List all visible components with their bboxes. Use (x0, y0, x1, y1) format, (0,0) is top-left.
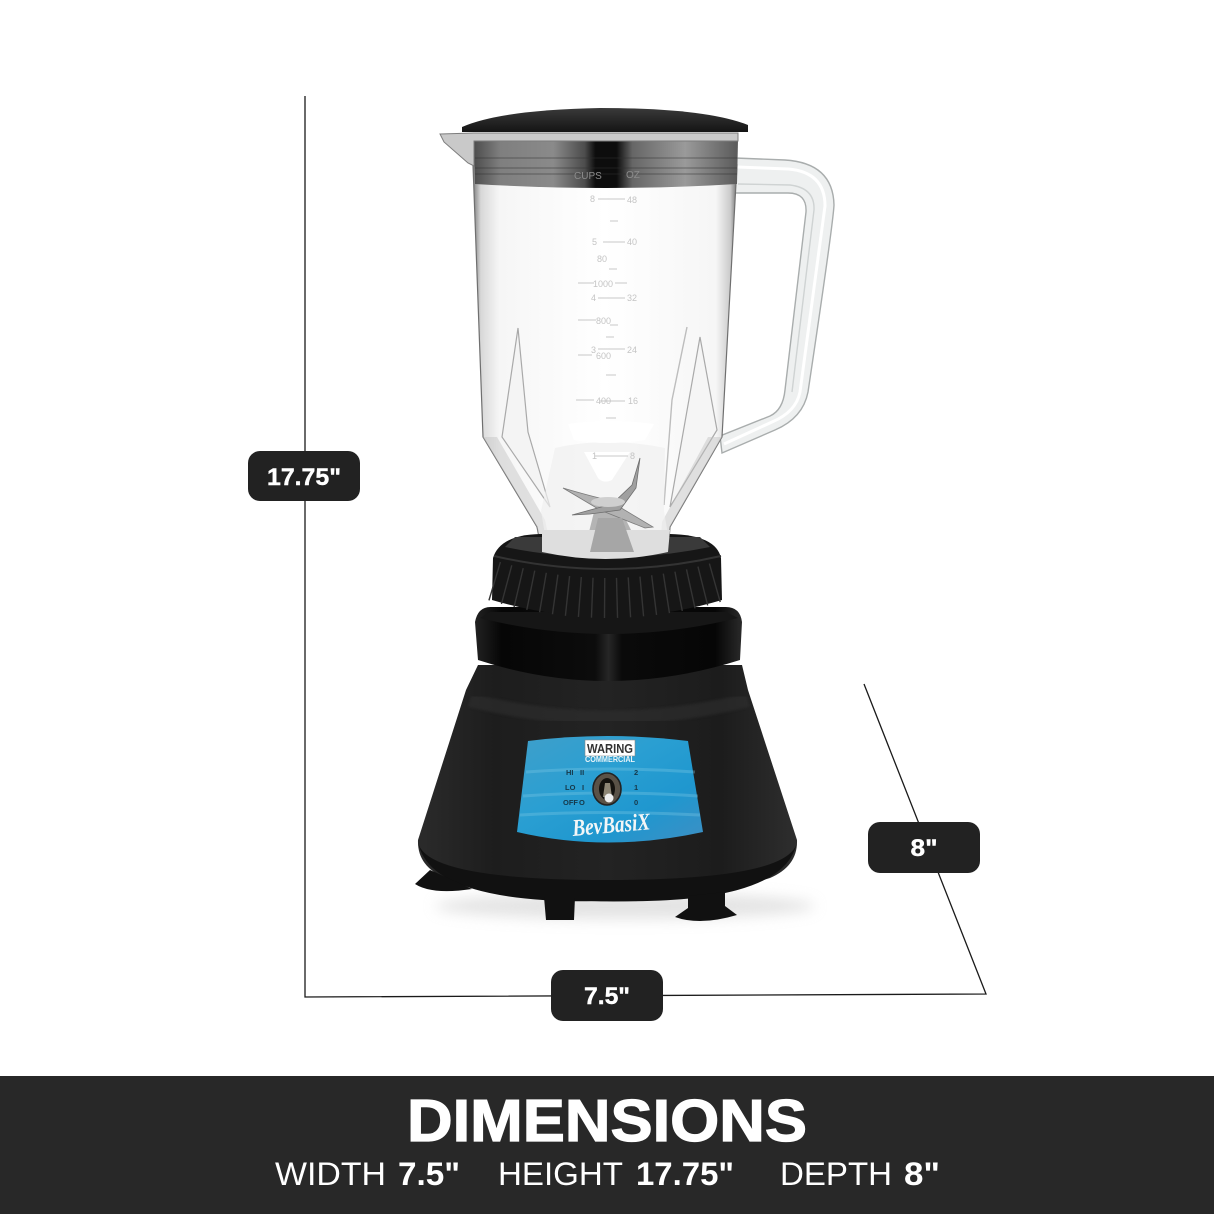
measurement scale: 24 (627, 345, 637, 355)
footer measurements: WIDTH (275, 1156, 386, 1192)
lower jar taper shading (483, 437, 552, 552)
switch labels: 0 (634, 798, 638, 807)
measurement scale: 400 (596, 396, 611, 406)
measurement scale: 1 (592, 451, 597, 461)
measurement scale: 16 (628, 396, 638, 406)
footer measurements: DEPTH (780, 1156, 892, 1192)
control plate (517, 736, 703, 842)
switch labels: O (579, 798, 585, 807)
measurement scale: 80 (597, 254, 607, 264)
jar body (473, 165, 737, 552)
measurement scale: 800 (596, 316, 611, 326)
switch labels (563, 768, 638, 807)
measurement scale: 1000 (593, 279, 613, 289)
measurement scale: 3 (591, 345, 596, 355)
brand logo: WARING (587, 741, 633, 756)
switch labels: II (580, 768, 584, 777)
width pill: 7.5" (584, 983, 630, 1010)
depth pill: 8" (910, 835, 938, 862)
height pill (248, 451, 360, 501)
footer measurements: 17.75" (636, 1156, 734, 1192)
measurement scale: 8 (630, 451, 635, 461)
motor base body (418, 665, 797, 902)
product name: BevBasiX (570, 809, 652, 842)
feet (415, 870, 737, 921)
dark rim band (474, 140, 738, 188)
measurement scale: 5 (592, 237, 597, 247)
blade assembly (563, 458, 653, 548)
lid (462, 108, 748, 132)
footer measurements: HEIGHT (498, 1156, 623, 1192)
switch labels: 2 (634, 768, 638, 777)
blender product illustration (415, 108, 834, 921)
height pill: 17.75" (267, 464, 341, 491)
left rib (502, 328, 550, 507)
measurement scale: 8 (590, 194, 595, 204)
footer measurements: 8" (904, 1156, 940, 1192)
footer measurements (275, 1156, 940, 1192)
measurement scale: 32 (627, 293, 637, 303)
dark rim band: OZ (626, 170, 640, 181)
brand logo: COMMERCIAL (585, 754, 635, 764)
measurement scale (576, 194, 638, 461)
spout and rim (440, 133, 738, 166)
measurement scale: 48 (627, 195, 637, 205)
dimension lines (305, 96, 986, 997)
footer title: DIMENSIONS (407, 1088, 807, 1154)
measurement scale: 600 (596, 351, 611, 361)
depth pill (868, 822, 980, 873)
switch labels: 1 (634, 783, 638, 792)
bevelled ring (475, 607, 742, 681)
right rib (670, 337, 717, 507)
width pill (551, 970, 663, 1021)
switch labels: LO (565, 783, 576, 792)
floor shadow (435, 893, 815, 919)
switch labels: I (582, 783, 584, 792)
switch labels: OFF (563, 798, 578, 807)
dark rim band: CUPS (574, 171, 602, 182)
measurement scale: 40 (627, 237, 637, 247)
collar (492, 518, 722, 617)
jar handle (720, 158, 834, 453)
toggle switch (593, 773, 621, 805)
brand logo (585, 740, 635, 764)
footer measurements: 7.5" (398, 1156, 460, 1192)
footer band (0, 1076, 1214, 1214)
switch labels: HI (566, 768, 574, 777)
measurement scale: 4 (591, 293, 596, 303)
